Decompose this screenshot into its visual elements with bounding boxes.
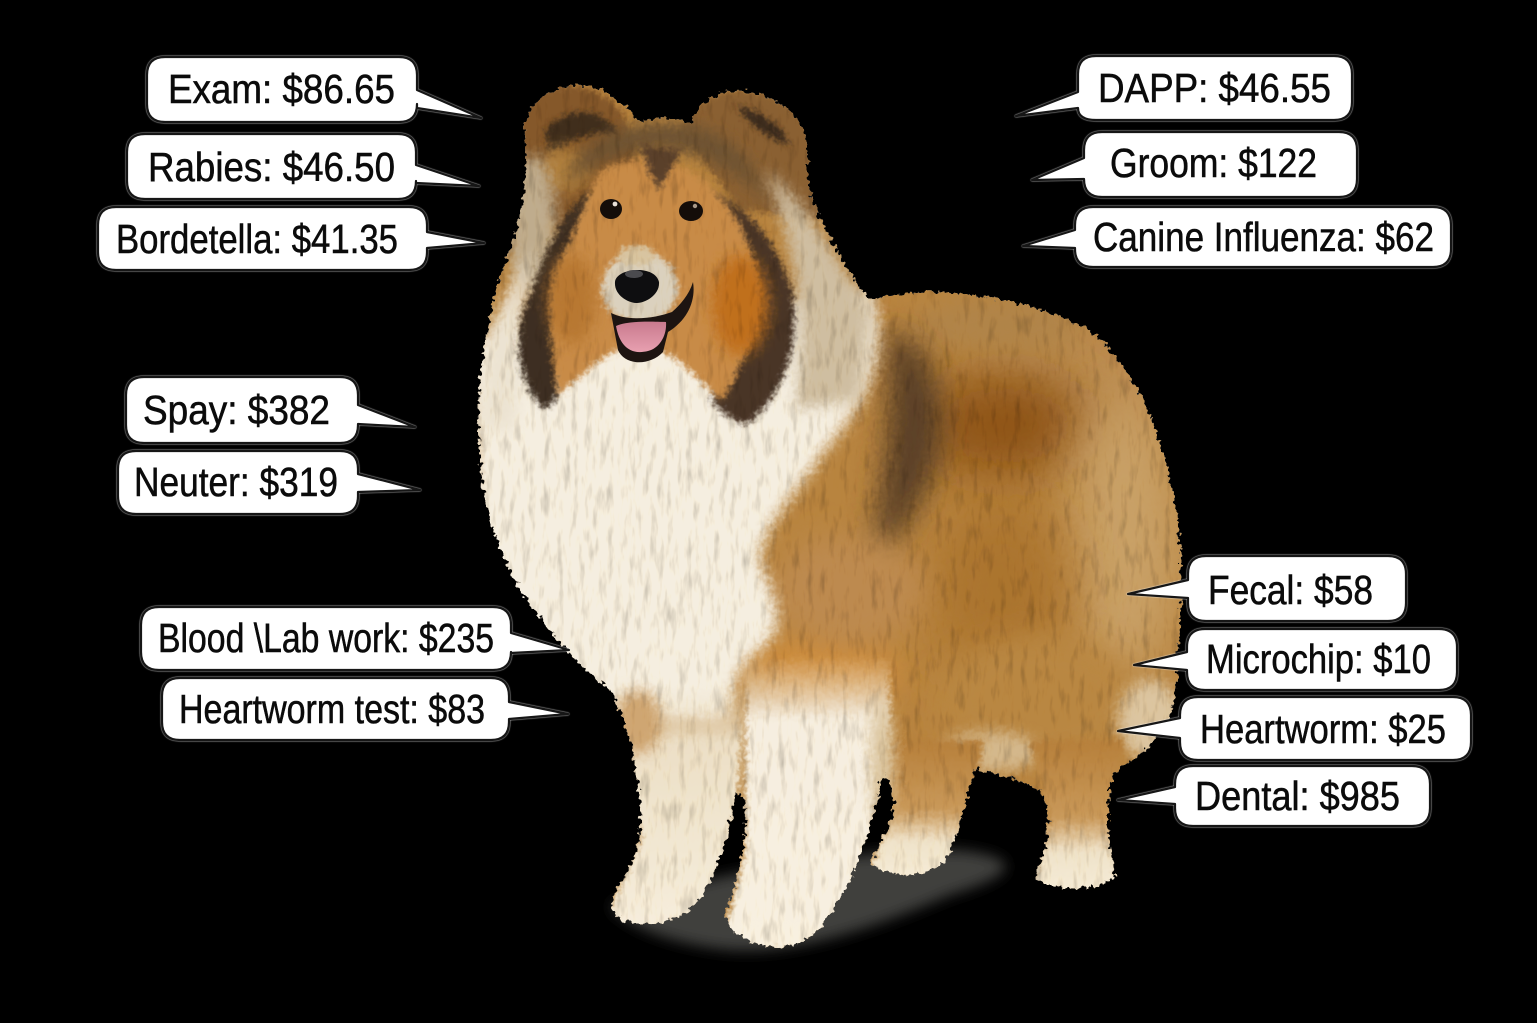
callout: Exam bbox=[147, 57, 481, 122]
dog body: rear coat bbox=[740, 297, 1182, 772]
ears bbox=[515, 85, 820, 230]
callout: Dental: Dental: $985 bbox=[1195, 773, 1400, 819]
callout: Exam: Exam: $86.65 bbox=[168, 66, 395, 112]
callout: Canine Influenza bbox=[1023, 207, 1451, 267]
callout: DAPP: DAPP: $46.55 bbox=[1098, 65, 1331, 111]
ground shadow bbox=[610, 850, 1005, 951]
callout: Groom bbox=[1032, 132, 1357, 197]
dog chest: white mane bbox=[470, 290, 878, 720]
callout: Rabies: Rabies: $46.50 bbox=[148, 144, 395, 190]
callout: Neuter bbox=[118, 451, 420, 514]
callout: Blood Lab work bbox=[141, 607, 569, 670]
face bbox=[551, 159, 757, 400]
eyes bbox=[600, 199, 703, 221]
dog hind legs bbox=[865, 740, 1125, 895]
callout: Bordetella bbox=[98, 207, 484, 270]
callout: Bordetella: Bordetella: $41.35 bbox=[116, 216, 398, 262]
tongue bbox=[616, 322, 666, 352]
callout: Heartworm test: Heartworm test: $83 bbox=[179, 686, 485, 732]
outer cheek fringes bbox=[508, 155, 556, 295]
dog illustration bbox=[460, 60, 1200, 960]
callout: Groom: Groom: $122 bbox=[1110, 140, 1317, 186]
callout: Rabies bbox=[127, 134, 479, 199]
head crown bbox=[565, 122, 770, 205]
dog front legs bbox=[600, 656, 894, 950]
mouth bbox=[611, 282, 694, 362]
callout: Microchip: Microchip: $10 bbox=[1206, 636, 1431, 682]
muzzle bbox=[602, 252, 678, 324]
callout: Microchip bbox=[1134, 629, 1457, 690]
nose bbox=[615, 270, 659, 303]
dog head bbox=[480, 85, 872, 430]
dog face details bbox=[600, 199, 703, 362]
callout: Heartworm test bbox=[162, 678, 568, 740]
callout: Fecal bbox=[1128, 556, 1406, 621]
orange cheek patch bbox=[712, 255, 768, 355]
callout: Neuter: Neuter: $319 bbox=[134, 459, 338, 505]
forehead stripe bbox=[640, 142, 685, 190]
callout: Dental bbox=[1118, 766, 1430, 826]
callout: Canine Influenza: Canine Influenza: $62 bbox=[1093, 214, 1434, 260]
callout: Spay bbox=[126, 377, 415, 443]
callout: Heartworm bbox=[1118, 697, 1471, 760]
callout: Spay: Spay: $382 bbox=[143, 387, 330, 433]
callout: DAPP bbox=[1016, 56, 1352, 120]
callout: Heartworm: Heartworm: $25 bbox=[1200, 706, 1446, 752]
dark side bands bbox=[519, 190, 596, 408]
callout: Blood Lab work: Blood \Lab work: $235 bbox=[158, 615, 494, 661]
callout: Fecal: Fecal: $58 bbox=[1208, 567, 1373, 613]
